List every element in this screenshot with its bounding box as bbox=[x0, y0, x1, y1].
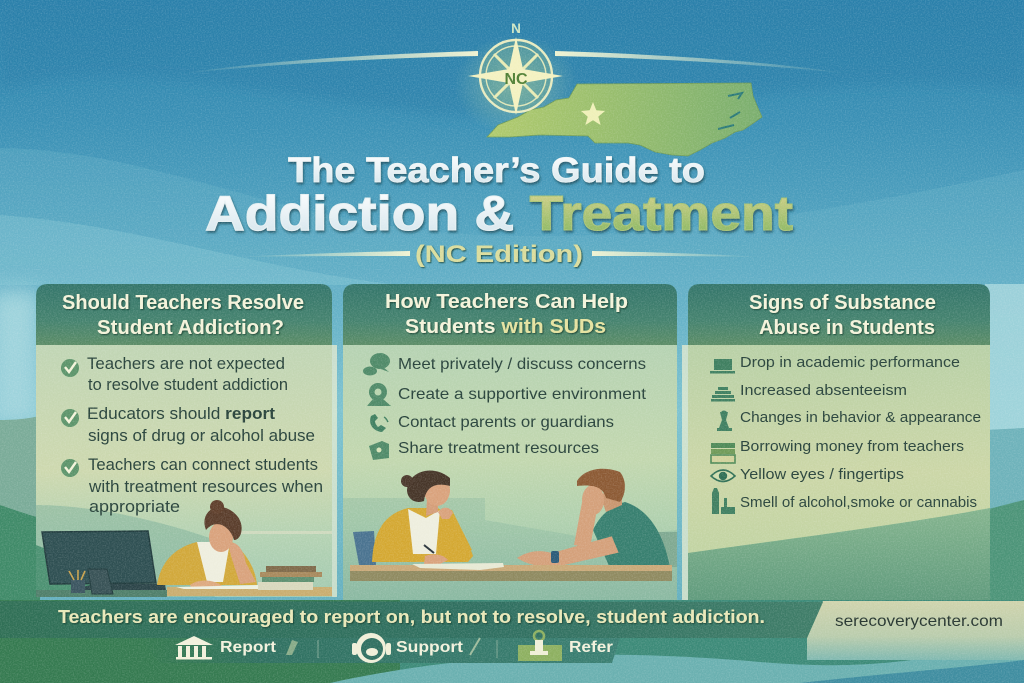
icon: stack of books bbox=[711, 387, 735, 402]
text: bullet 1 bbox=[87, 355, 288, 394]
illustration: teacher at desk bbox=[36, 500, 332, 597]
title: The Teacher’s Guide to bbox=[288, 151, 705, 190]
teacher figure bbox=[372, 470, 473, 564]
text: contact parents: Contact parents or guardians bbox=[398, 414, 614, 431]
icon: laptop bbox=[710, 359, 735, 374]
icon: refer signpost bbox=[518, 631, 562, 661]
map: North Carolina with star bbox=[454, 35, 762, 156]
text: bullet 2: Educators should report bbox=[87, 405, 276, 423]
icon: check 2 bbox=[61, 409, 79, 427]
panel heading: Should Teachers Resolve bbox=[62, 292, 304, 314]
decorative swooshes: compass bbox=[178, 51, 852, 74]
icon: check 1 bbox=[61, 359, 79, 377]
text: bullet 1: to resolve student addiction bbox=[88, 376, 288, 394]
text: bullet 2: signs of drug or alcohol abuse bbox=[88, 427, 315, 445]
icon: compass rose with NC bbox=[468, 21, 563, 115]
label: refer: Refer bbox=[569, 639, 613, 656]
icon: support headset bbox=[352, 633, 391, 663]
icon: compass rose with NC: N bbox=[511, 21, 521, 36]
icon: check 3 bbox=[61, 459, 79, 477]
monitor bbox=[42, 531, 156, 584]
panel heading: Student Addiction? bbox=[97, 317, 284, 339]
text: smell: Smell of alcohol,smoke or cannabis bbox=[740, 494, 977, 511]
subtitle: (NC Edition) bbox=[415, 241, 583, 268]
panel: should teachers resolve student addiction bbox=[36, 284, 337, 597]
icon: speech bubbles bbox=[363, 353, 390, 376]
panel heading: Abuse in Students bbox=[759, 317, 935, 339]
table and notepad bbox=[350, 565, 672, 571]
icon: phone bbox=[370, 414, 388, 432]
panel heading: Signs of Substance bbox=[749, 292, 936, 314]
icon: star on map bbox=[581, 102, 605, 125]
text: money: Borrowing money from teachers bbox=[740, 438, 964, 455]
icon: compass rose with NC: NC bbox=[504, 71, 528, 88]
text: bullet 3: Teachers can connect students bbox=[88, 456, 318, 474]
text: bullet 3: with treatment resources when bbox=[88, 478, 323, 496]
icon: slash bbox=[470, 638, 480, 655]
text: academic: Drop in academic performance bbox=[740, 354, 960, 371]
icon: supportive person bbox=[367, 383, 391, 406]
panel heading bbox=[343, 284, 677, 345]
text: bullet 3 bbox=[88, 456, 323, 516]
icon: report building bbox=[175, 636, 213, 660]
panel heading: How Teachers Can Help bbox=[385, 291, 628, 313]
text: supportive environment: Create a supportive environment bbox=[398, 386, 647, 403]
chair bbox=[353, 531, 376, 565]
teacher bbox=[157, 500, 262, 589]
callout text: Teachers are encouraged to report on, but not to resolve, student addiction. bbox=[58, 607, 765, 627]
icon: money bbox=[711, 443, 735, 463]
panel heading bbox=[688, 284, 990, 345]
panel: signs of substance abuse bbox=[682, 284, 990, 600]
icon: figure bbox=[717, 410, 732, 431]
photo frame bbox=[88, 569, 113, 594]
text: bullet 1: Teachers are not expected bbox=[87, 355, 285, 373]
panel heading: Students with SUDs bbox=[405, 316, 606, 338]
title: Addiction & Treatment bbox=[205, 187, 793, 241]
text: bullet 3: appropriate bbox=[89, 498, 180, 516]
icon: bottle and ashtray bbox=[712, 488, 735, 514]
text: behavior: Changes in behavior & appearance bbox=[740, 409, 981, 426]
label: report: Report bbox=[220, 639, 277, 656]
pencil cup bbox=[69, 570, 85, 593]
student figure bbox=[517, 469, 670, 568]
footer band bbox=[0, 601, 1024, 663]
text: meet privately: Meet privately / discuss concerns bbox=[398, 356, 646, 373]
icon: resource tag bbox=[369, 441, 389, 460]
text: absenteeism: Increased absenteeism bbox=[740, 382, 907, 399]
icon: eye bbox=[711, 470, 735, 482]
text: eyes: Yellow eyes / fingertips bbox=[740, 466, 904, 483]
title bbox=[205, 151, 793, 268]
text: share resources: Share treatment resources bbox=[398, 440, 599, 457]
illustration: teacher and student at table bbox=[350, 469, 677, 581]
panel: how teachers can help bbox=[343, 284, 677, 600]
books bbox=[258, 566, 322, 590]
subtitle bbox=[235, 241, 762, 268]
panel heading bbox=[36, 284, 332, 345]
website: serecoverycenter.com bbox=[835, 613, 1003, 630]
paper bbox=[176, 585, 262, 589]
icon: pencil bbox=[286, 640, 298, 655]
text: bullet 2 bbox=[87, 405, 315, 445]
label: support: Support bbox=[396, 639, 464, 656]
